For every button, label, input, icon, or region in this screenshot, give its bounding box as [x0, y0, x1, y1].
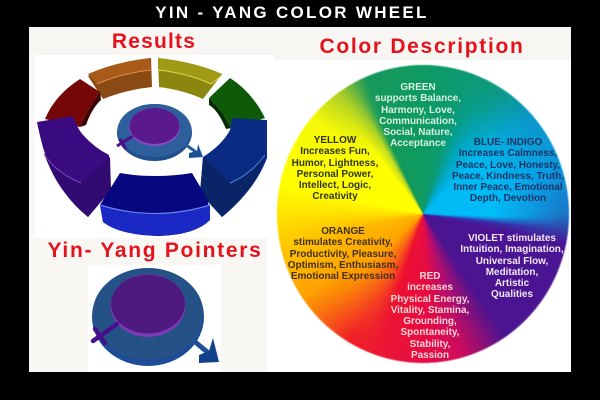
segment: orange [88, 58, 152, 99]
panel: color description [274, 27, 571, 372]
text: green: Harmony, Love, [381, 104, 455, 116]
text: yellow [292, 135, 378, 202]
text: red: Vitality, Stamina, [391, 305, 469, 316]
pointers background band [29, 238, 267, 372]
pointers image background [88, 265, 221, 372]
text: red: RED [420, 271, 440, 282]
large pointer: yang arrow [194, 338, 219, 363]
text: blue-indigo [452, 137, 564, 204]
text: red: Stability, [410, 338, 450, 350]
segment: violet [37, 116, 111, 217]
small pointer: yang arrow [186, 144, 203, 158]
text: blue-indigo: Peace, Kindness, Truth, [452, 171, 564, 182]
results heading band [29, 27, 274, 55]
segment: blue bottom [100, 173, 210, 236]
panel: results and pointers [29, 27, 274, 372]
text: red: Passion [411, 350, 449, 361]
chart: color wheel [277, 65, 569, 363]
text: orange: Optimism, Enthusiasm, [288, 260, 398, 271]
text: orange: ORANGE [321, 226, 365, 237]
chart: 3D results ring [37, 58, 267, 366]
text: blue-indigo: Peace, Love, Honesty, [456, 160, 560, 170]
text: green [375, 82, 461, 149]
text: green: supports Balance, [375, 93, 461, 104]
segment: red [45, 79, 101, 127]
text: yellow: Humor, Lightness, [292, 158, 378, 168]
segment: green [209, 78, 265, 129]
text: violet: Universal Flow, [476, 256, 548, 266]
title: YIN - YANG COLOR WHEEL [155, 3, 429, 22]
wheel rim shading [277, 65, 569, 363]
text: red: Spontaneity, [401, 327, 459, 338]
text: blue-indigo: Depth, Devotion [470, 193, 546, 204]
left edge strip [29, 55, 35, 238]
text: violet: Meditation, [486, 267, 538, 278]
text: yellow: Intellect, Logic, [299, 180, 371, 191]
text: red: increases [407, 282, 453, 293]
text: violet: Qualities [491, 289, 533, 300]
heading: yin-yang pointers: Yin- Yang Pointers [48, 239, 262, 262]
text: red [390, 271, 469, 361]
large pointer: yin cross [93, 324, 117, 343]
text: blue-indigo: Inner Peace, Emotional [453, 182, 563, 193]
text: yellow: Creativity [312, 191, 358, 202]
text: red: Physical Energy, [391, 294, 469, 304]
text: orange [288, 226, 398, 282]
small pointer disc [117, 104, 192, 161]
text: violet: Intuition, Imagination, [460, 244, 564, 255]
text: yellow: Increases Fun, [300, 146, 370, 157]
segment: yellow [158, 58, 222, 99]
text: violet [460, 233, 564, 300]
text: orange: Productivity, Pleasure, [290, 248, 396, 260]
text: green: Acceptance [390, 138, 446, 149]
text: violet: Artistic [495, 278, 529, 289]
text: blue-indigo: Increases Calmness, [459, 148, 557, 159]
heading: color description: Color Description [319, 35, 525, 58]
text: green: Communication, [379, 116, 457, 127]
text: orange: stimulates Creativity, [293, 237, 393, 248]
text: violet: VIOLET stimulates [468, 233, 556, 244]
text: orange: Emotional Expression [291, 271, 395, 282]
text: green: Social, Nature, [383, 127, 453, 138]
text: yellow: Personal Power, [297, 169, 373, 180]
description heading band [274, 27, 571, 60]
heading: results: Results [112, 30, 196, 53]
text: yellow: YELLOW [314, 135, 356, 146]
text: red: Grounding, [403, 316, 457, 327]
small pointer: yin cross [117, 136, 133, 149]
large pointer disc [92, 268, 204, 366]
text: blue-indigo: BLUE- INDIGO [474, 137, 542, 148]
segment: blue right [200, 118, 267, 217]
text: green: GREEN [400, 82, 436, 93]
